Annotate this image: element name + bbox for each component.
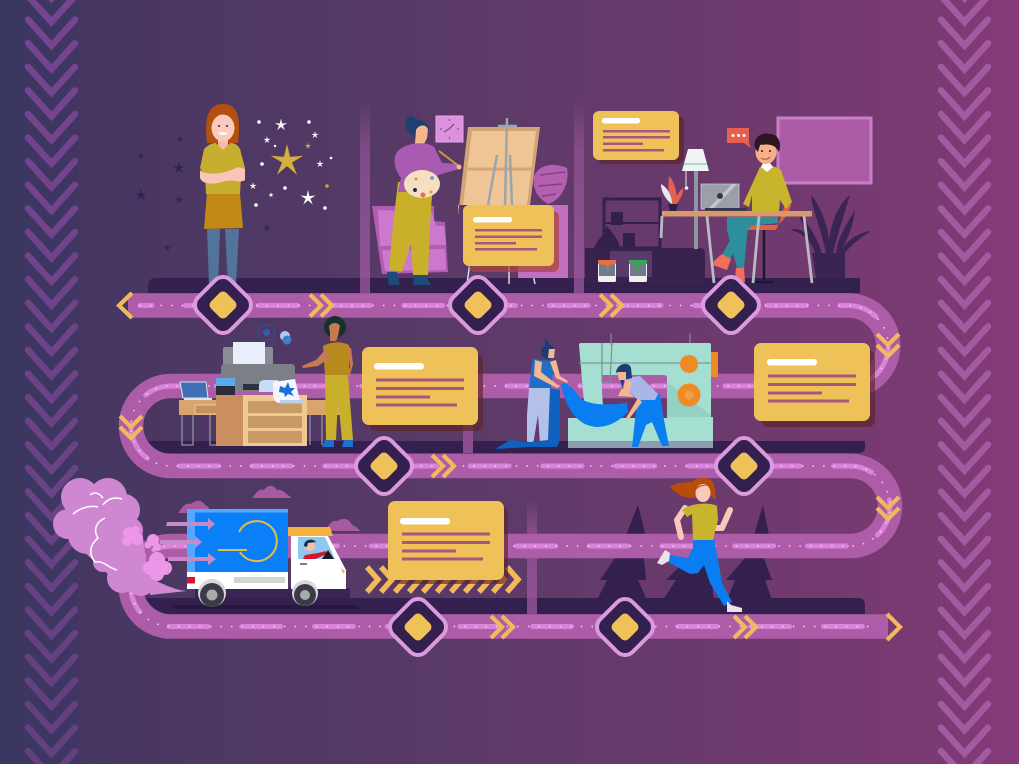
- wall clock: [436, 116, 463, 142]
- floor: row 2: [143, 441, 865, 453]
- undercarriage: [195, 588, 350, 598]
- right table: [307, 400, 349, 445]
- speech bubble: [727, 128, 751, 148]
- floor lamp: [682, 149, 709, 249]
- woman at machine: [616, 364, 669, 447]
- runner arms: [677, 508, 730, 537]
- cargo box: [187, 509, 288, 589]
- scene: office: [585, 118, 871, 283]
- armchair cushions: [378, 210, 446, 271]
- rear shoe: [657, 550, 670, 565]
- blue fabric: [561, 383, 628, 427]
- start arrow: [119, 293, 132, 318]
- scene: painter: [372, 116, 568, 285]
- laptop: [701, 184, 747, 210]
- chevron strip under card 5: [367, 567, 518, 592]
- card 1 shadow: [469, 211, 559, 272]
- office chair: [745, 200, 791, 282]
- road dots: [131, 306, 890, 626]
- paint can: green: [629, 260, 647, 282]
- milestone marker 4: [351, 433, 417, 499]
- man at laptop: [713, 134, 792, 282]
- road direction arrows: [119, 293, 900, 640]
- runner hair: [670, 478, 716, 500]
- sewing machine body: [568, 333, 718, 448]
- chevrons: row 5 right: [734, 616, 756, 638]
- desk plant: [661, 176, 683, 211]
- card 3 shadow: [369, 354, 483, 431]
- chevrons: row 1 left: [310, 294, 332, 316]
- scene: woman with stars: [135, 104, 332, 284]
- chair post: [755, 230, 773, 282]
- left chevron fade: [20, 0, 78, 764]
- card 2 shadow: [598, 116, 684, 164]
- card 2: [593, 111, 679, 160]
- pillar: row 2: [463, 398, 473, 453]
- scene: sewing machine: [495, 333, 718, 449]
- delivery truck: [160, 509, 357, 609]
- milestone marker 5: [711, 433, 777, 499]
- silhouette plant: [790, 195, 871, 278]
- woman holding fabric: [495, 338, 568, 449]
- chevrons: right turn lower: [877, 497, 899, 519]
- sweater: [743, 166, 792, 212]
- exhaust cloud: [53, 478, 187, 596]
- printer: [216, 342, 295, 395]
- chevrons: row 1 right: [600, 294, 622, 316]
- wall picture: [778, 118, 871, 183]
- pillar: row 3: [527, 500, 537, 614]
- painter figure: [387, 116, 462, 285]
- chevrons: row 3: [432, 455, 454, 477]
- truck shadow: [173, 605, 357, 609]
- card 1: [463, 205, 554, 266]
- milestone marker 2: [445, 272, 511, 338]
- runner face: [696, 484, 710, 502]
- stars: [135, 118, 332, 251]
- left chevron column: [20, 0, 82, 764]
- chevrons: right turn top: [877, 334, 899, 356]
- runner hair fringe: [695, 485, 712, 491]
- card 4: [754, 343, 870, 421]
- card 3: [362, 347, 478, 425]
- pink plant: [518, 165, 568, 278]
- scene: printer workshop: [179, 316, 353, 447]
- front wheel: [292, 580, 318, 606]
- shelf: [594, 199, 660, 248]
- chevrons: left turn: [120, 416, 142, 438]
- woman arms crossed: [200, 104, 245, 284]
- right side band: [938, 0, 1019, 764]
- motion arrows: [160, 518, 216, 565]
- paint can: orange: [598, 260, 616, 282]
- cloud highlights: [73, 493, 122, 570]
- road body: [128, 306, 890, 626]
- hologram icons: [259, 325, 292, 344]
- armchair: [372, 206, 448, 274]
- light puffs: [122, 526, 172, 581]
- right chevron column: [933, 0, 995, 764]
- card 5: [388, 501, 504, 580]
- cabinet: [585, 248, 705, 283]
- left table: [179, 400, 224, 445]
- milestone marker 6: [385, 594, 451, 660]
- runner shirt: [682, 504, 718, 540]
- laptop: [180, 382, 212, 400]
- easel canvas: [458, 118, 540, 284]
- floor: row 3: [144, 598, 865, 614]
- floor: row 1: [148, 278, 860, 293]
- cabinet light panel: [610, 251, 652, 277]
- rear wheel: [198, 579, 226, 607]
- left side band: [0, 0, 78, 764]
- runner legs: [668, 538, 732, 606]
- printed fabric: [273, 379, 304, 404]
- card 5 shadow: [394, 507, 508, 584]
- milestone marker 7: [592, 594, 658, 660]
- chevrons: row 5 left: [491, 616, 513, 638]
- cab: [288, 527, 346, 589]
- road dashes: [131, 306, 890, 626]
- worker standing: [302, 316, 353, 447]
- milestone marker 3: [698, 272, 764, 338]
- runner: [657, 478, 742, 612]
- front shoe: [727, 601, 742, 612]
- shoes: [713, 254, 745, 282]
- desk: [661, 211, 812, 283]
- milestone marker 1: [190, 272, 256, 338]
- winding road: [128, 306, 890, 626]
- pillar: row 1 right: [574, 100, 584, 293]
- end arrow: [887, 614, 900, 640]
- pillar: row 1 left: [360, 100, 370, 293]
- cloud puffs: [53, 478, 187, 596]
- small clouds: [178, 486, 361, 531]
- crossed legs: [722, 217, 778, 268]
- card 4 shadow: [761, 350, 875, 427]
- pine trees: [597, 503, 772, 600]
- drawer cabinet: [216, 395, 307, 446]
